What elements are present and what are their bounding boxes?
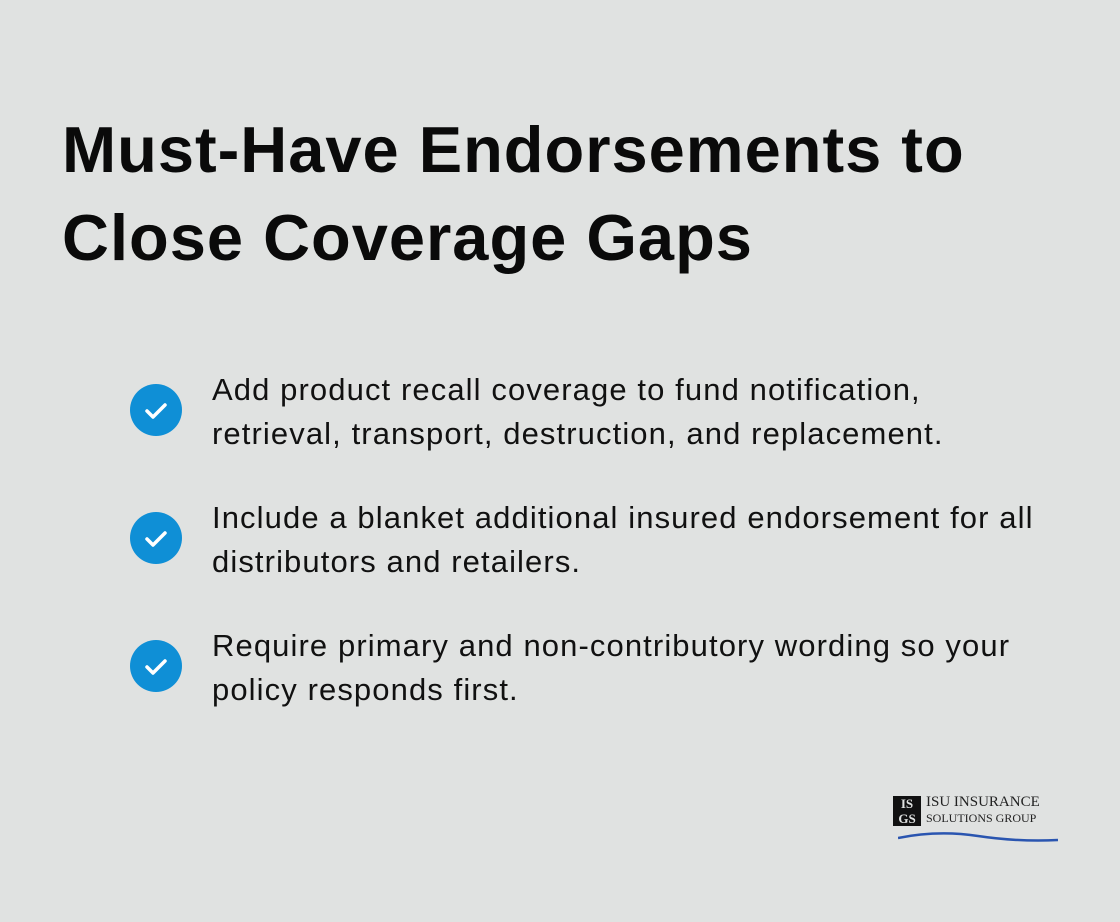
text 3 [212, 628, 1010, 707]
text 2: Include a blanket additional insured endorsement for all [212, 500, 1034, 535]
item 3 [130, 628, 1010, 707]
text 2: distributors and retailers. [212, 544, 581, 579]
icon: check [130, 640, 182, 692]
text 1 [212, 372, 944, 451]
text 3: policy responds first. [212, 672, 519, 707]
logo text [926, 794, 1040, 825]
title: Close Coverage Gaps [62, 201, 753, 274]
title [62, 113, 965, 274]
title: Must-Have Endorsements to [62, 113, 965, 186]
text 1: Add product recall coverage to fund notification, [212, 372, 921, 407]
text 1: retrieval, transport, destruction, and replacement. [212, 416, 944, 451]
item 1 [130, 372, 944, 451]
item 2 [130, 500, 1034, 579]
icon: check [130, 512, 182, 564]
logo text: ISU INSURANCE [926, 794, 1040, 810]
text 2 [212, 500, 1034, 579]
logo mark: IS [901, 796, 913, 811]
logo [893, 794, 1058, 842]
logo mark [893, 796, 921, 826]
icon: check [130, 384, 182, 436]
logo mark: GS [898, 811, 916, 826]
logo text: SOLUTIONS GROUP [926, 811, 1036, 825]
text 3: Require primary and non-contributory wording so your [212, 628, 1010, 663]
